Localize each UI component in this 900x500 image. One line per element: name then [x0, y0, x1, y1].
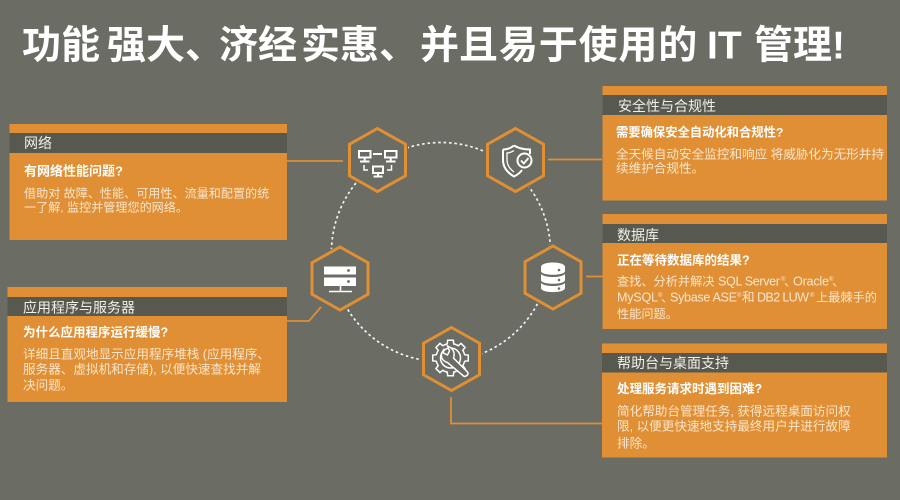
question: security: 需要确保安全自动化和合规性? [616, 124, 783, 140]
question: help desk: 处理服务请求时遇到困难? [617, 381, 762, 396]
title: IT [707, 24, 742, 68]
connector: applications [287, 307, 321, 321]
body: help desk [617, 404, 851, 450]
title: 功能 [22, 24, 100, 68]
body: database [617, 274, 877, 321]
title: 实惠、 [301, 24, 418, 68]
question: network: 有网络性能问题? [24, 164, 123, 178]
panel: help desk and desktop support [602, 344, 887, 458]
title: 并且 [420, 24, 498, 68]
body: database: 、 [784, 274, 797, 288]
body: database: MySQL [617, 290, 658, 304]
body: help desk: 简化帮助台管理任务, 获得远程桌面访问权 [617, 404, 851, 418]
panel: network [10, 124, 287, 240]
hexagon: network [350, 128, 406, 192]
body: security: 全天候自动安全监控和响应 将威胁化为无形并持 [616, 146, 884, 162]
heading: database: 数据库 [617, 227, 659, 243]
title [22, 24, 845, 68]
body: database: Oracle [793, 274, 829, 288]
body: applications [23, 346, 270, 392]
question: database: 正在等待数据库的结果? [617, 252, 750, 268]
body: network: 借助对 故障、性能、可用性、流量和配置的统 [24, 186, 269, 200]
body: database: 性能问题。 [617, 307, 678, 321]
body: security [616, 146, 884, 176]
body: help desk: 限, 以便更快速地支持最终用户并进行故障 [617, 418, 851, 434]
body: database: SQL Server [718, 274, 780, 288]
dashed circle ring [332, 142, 550, 362]
body: database: 、 [832, 274, 845, 288]
heading: applications and servers: 应用程序与服务器 [23, 300, 135, 316]
body: database: ® [737, 292, 742, 299]
panel: database [602, 214, 887, 329]
body: applications: 服务器、虚拟机和存储), 以便快速查找并解 [23, 362, 261, 376]
title: 管理! [754, 24, 845, 68]
hexagon: servers [312, 247, 368, 310]
body: database: DB2 LUW [757, 290, 809, 304]
body: database: ® [781, 276, 786, 283]
hexagon: help desk [424, 328, 480, 390]
hexagon: security [488, 128, 544, 192]
connector: network [287, 160, 343, 162]
body: database: 查找、分析并解决 [617, 274, 714, 288]
icon: gear and wrench [433, 340, 468, 376]
icon: network computers [359, 151, 396, 176]
body: database: 和 [742, 290, 755, 304]
connector: database [586, 276, 603, 278]
body: database: ® [810, 292, 815, 299]
body: database: Sybase ASE [670, 290, 737, 304]
body: database: 上最棘手的 [816, 290, 877, 304]
body: database: ® [658, 292, 663, 299]
icon: shield with check [503, 146, 532, 176]
title: 强大、 [107, 24, 224, 68]
heading: help desk: 帮助台与桌面支持 [617, 355, 729, 371]
heading: security: 安全性与合规性 [618, 98, 716, 114]
body: database: 、 [661, 290, 674, 304]
body: applications: 详细且直观地显示应用程序堆栈 (应用程序、 [23, 346, 270, 362]
body: network [24, 186, 269, 214]
title: 易于使用的 [499, 24, 698, 68]
body: database: ® [829, 276, 834, 283]
panel: applications and servers [8, 287, 287, 402]
icon: server rack [324, 266, 356, 292]
body: security: 续维护合规性。 [616, 160, 704, 176]
body: network: 一了解, 监控并管理您的网络。 [24, 200, 188, 214]
connector: security [548, 158, 602, 160]
heading: network: 网络 [24, 135, 52, 151]
question: applications: 为什么应用程序运行缓慢? [23, 324, 168, 340]
icon: database stack [541, 262, 565, 292]
body: help desk: 排除。 [617, 436, 655, 450]
panel: security and compliance [602, 86, 887, 200]
body: applications: 决问题。 [23, 378, 73, 392]
connector: help desk [451, 397, 603, 424]
hexagon: database [525, 246, 581, 309]
title: 济经 [219, 24, 297, 68]
